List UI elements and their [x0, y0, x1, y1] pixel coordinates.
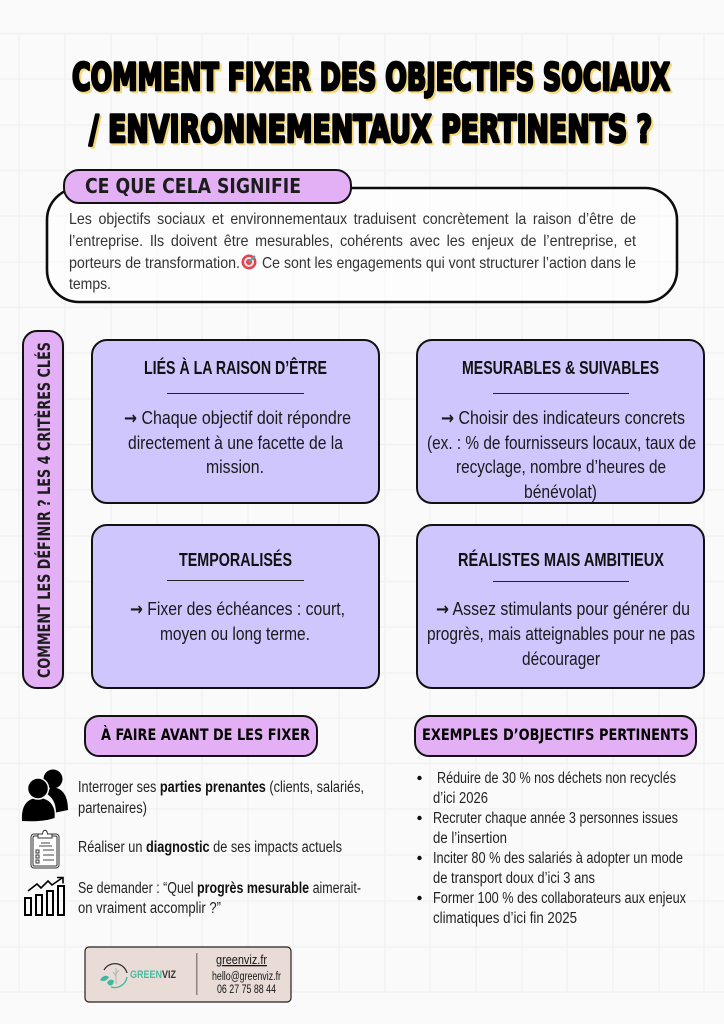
card: mesurables et suivables: → Choisir des indicateurs concrets — [441, 407, 685, 429]
heading: ce que cela signifie — [64, 170, 351, 203]
list: exemples d'objectifs: d’ici 2026 — [433, 790, 488, 807]
title — [72, 56, 670, 151]
list: à faire avant de les fixer: Réaliser un diagnostic de ses impacts actuels — [78, 839, 342, 856]
card: réalistes mais ambitieux — [417, 525, 704, 688]
icon: target — [242, 254, 256, 270]
text block: définition: Ce sont les engagements qui vont structurer l’action dans le — [262, 255, 636, 272]
list: à faire avant de les fixer: Interroger ses parties prenantes (clients, salariés, — [78, 779, 364, 796]
card: mesurables et suivables: MESURABLES & SUIVABLES — [462, 357, 659, 378]
text block: définition: porteurs de transformation. — [69, 255, 240, 272]
list: exemples d'objectifs: climatiques d’ici fin 2025 — [433, 910, 577, 927]
icon: clipboard — [31, 830, 59, 868]
text block: définition: l’entreprise. Ils doivent être mesurables, cohérents avec les enjeux de l’entreprise, et — [69, 233, 636, 250]
card: liés à la raison d'être — [92, 340, 379, 503]
list: exemples d'objectifs: de transport doux d’ici 3 ans — [433, 870, 595, 887]
logo: greenviz — [100, 964, 176, 988]
card: réalistes mais ambitieux: décourager — [522, 648, 600, 669]
heading: à faire avant de les fixer: À FAIRE AVANT DE LES FIXER — [101, 725, 310, 744]
footer: contact card — [85, 947, 291, 1002]
panel: ce que cela signifie — [47, 170, 677, 302]
card: liés à la raison d'être: LIÉS À LA RAISON D’ÊTRE — [144, 357, 327, 378]
heading: exemples d'objectifs pertinents — [415, 716, 696, 756]
logo: greenviz: GREENVIZ — [130, 969, 176, 981]
list: à faire avant de les fixer: Se demander : “Quel progrès mesurable aimerait- — [78, 880, 361, 897]
card: réalistes mais ambitieux: RÉALISTES MAIS AMBITIEUX — [458, 549, 665, 570]
card: temporalisés: moyen ou long terme. — [160, 623, 310, 644]
footer: contact details: 06 27 75 88 44 — [217, 984, 276, 996]
card: temporalisés: TEMPORALISÉS — [179, 549, 292, 570]
side heading: les 4 critères clés: COMMENT LES DÉFINIR ? LES 4 CRITÈRES CLÉS — [35, 342, 54, 678]
footer: contact details — [212, 952, 281, 996]
side heading: les 4 critères clés — [23, 331, 63, 688]
list: exemples d'objectifs: Recruter chaque année 3 personnes issues — [433, 810, 678, 827]
text block: définition: temps. — [69, 276, 111, 293]
list: exemples d'objectifs — [417, 770, 686, 927]
heading: ce que cela signifie: CE QUE CELA SIGNIFIE — [85, 174, 301, 198]
card: mesurables et suivables — [417, 340, 704, 503]
card: mesurables et suivables: bénévolat) — [524, 481, 597, 502]
card: temporalisés — [92, 525, 379, 688]
card: réalistes mais ambitieux: → Assez stimulants pour générer du — [436, 598, 690, 620]
list: exemples d'objectifs: de l’insertion — [433, 830, 507, 847]
footer: contact details: greenviz.fr — [216, 952, 268, 967]
icon: people — [22, 770, 68, 821]
card: liés à la raison d'être: mission. — [206, 456, 264, 477]
card: mesurables et suivables: recyclage, nombre d’heures de — [456, 456, 666, 477]
card: liés à la raison d'être: → Chaque objectif doit répondre — [124, 407, 351, 429]
card: liés à la raison d'être: directement à une facette de la — [128, 432, 344, 453]
footer: contact details: hello@greenviz.fr — [212, 971, 281, 983]
list: à faire avant de les fixer — [78, 779, 364, 917]
text block: définition: Les objectifs sociaux et environnementaux traduisent concrètement la raison d’être de — [69, 211, 636, 228]
heading: à faire avant de les fixer — [85, 716, 317, 756]
list: à faire avant de les fixer: partenaires) — [78, 800, 147, 817]
list: à faire avant de les fixer: on vraiment accomplir ?” — [78, 900, 221, 917]
card: temporalisés: → Fixer des échéances : court, — [130, 598, 345, 620]
icon: growth chart — [25, 878, 64, 915]
text block: définition — [69, 211, 636, 293]
list: exemples d'objectifs: Réduire de 30 % nos déchets non recyclés — [437, 770, 676, 787]
